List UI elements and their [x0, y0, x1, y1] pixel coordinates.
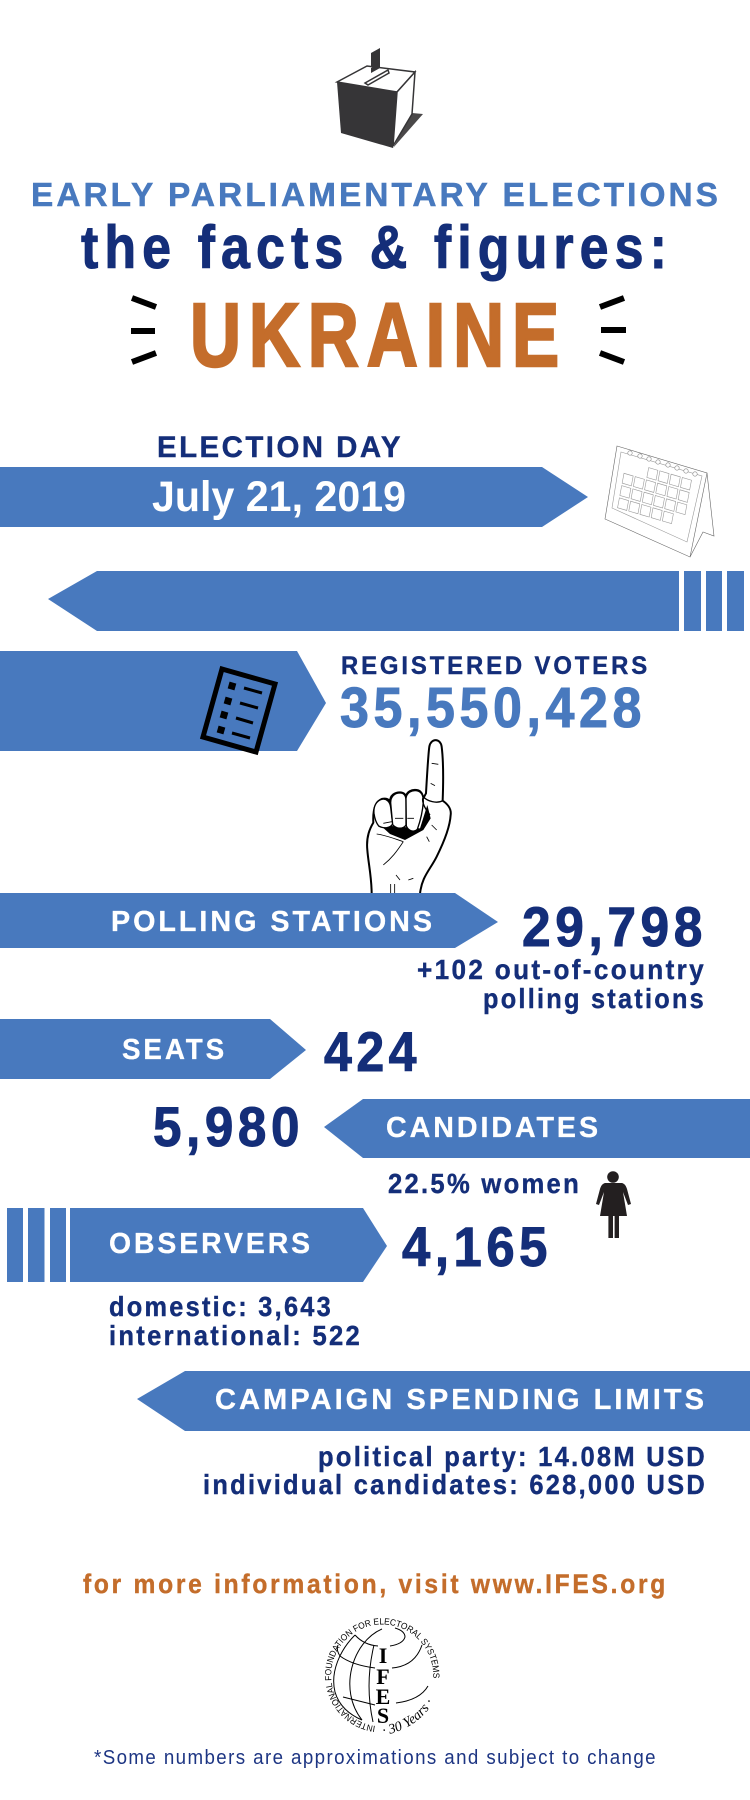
note: observer breakdown — [109, 1291, 362, 1351]
note: out-of-country stations: +102 out-of-country — [417, 954, 706, 985]
arrow: polling stations: POLLING STATIONS — [111, 906, 435, 938]
footnote: *Some numbers are approximations and subject to change — [94, 1747, 657, 1769]
logo: IFES globe: I — [379, 1643, 387, 1668]
note: observer breakdown: domestic: 3,643 — [109, 1291, 333, 1322]
title: the facts and figures: the facts & figures: — [81, 214, 673, 281]
arrow: seats — [0, 1019, 306, 1079]
logo: IFES globe: · 30 Years · — [383, 1700, 430, 1734]
icon: desk calendar — [605, 446, 714, 557]
arrow: blank left-pointing band with stripes — [48, 571, 744, 631]
icon: woman figure — [596, 1171, 631, 1238]
number: seats: 424 — [324, 1020, 421, 1083]
heading: early parliamentary elections: EARLY PARLIAMENTARY ELECTIONS — [31, 176, 721, 213]
decoration: left emphasis dashes — [131, 298, 156, 362]
note: out-of-country stations — [417, 954, 706, 1014]
note: observer breakdown: international: 522 — [109, 1320, 362, 1351]
arrow: candidates: CANDIDATES — [386, 1112, 601, 1144]
logo: IFES globe: F — [376, 1664, 390, 1689]
title: Ukraine: UKRAINE — [190, 286, 567, 386]
logo: IFES globe: S — [377, 1703, 389, 1728]
arrow: registered voters band — [0, 651, 326, 751]
arrow: observers with stripes — [7, 1208, 387, 1282]
arrow: election date: July 21, 2019 — [152, 473, 406, 521]
arrow: observers with stripes: OBSERVERS — [109, 1228, 313, 1260]
arrow: polling stations — [0, 893, 498, 948]
number: candidates: 5,980 — [153, 1095, 304, 1158]
label: registered voters: REGISTERED VOTERS — [341, 652, 650, 680]
arrow: campaign spending limits — [137, 1371, 750, 1431]
arrow: candidates — [324, 1099, 750, 1158]
label: election day: ELECTION DAY — [157, 431, 403, 464]
number: polling stations: 29,798 — [522, 895, 707, 958]
note: spending limit amounts — [203, 1441, 707, 1500]
icon: pointing hand — [367, 740, 451, 894]
icon: checklist — [203, 669, 275, 752]
arrow: campaign spending limits: CAMPAIGN SPENDING LIMITS — [215, 1384, 707, 1416]
number: observers: 4,165 — [402, 1215, 552, 1278]
note: spending limit amounts: individual candidates: 628,000 USD — [203, 1469, 707, 1500]
logo: IFES globe: E — [376, 1684, 390, 1709]
logo: IFES globe: INTERNATIONAL FOUNDATION FOR ELECTORAL SYSTEMS — [324, 1618, 440, 1732]
decoration: right emphasis dashes — [600, 298, 626, 362]
icon: ballot box — [337, 48, 423, 148]
note: spending limit amounts: political party: 14.08M USD — [318, 1441, 707, 1472]
note: out-of-country stations: polling stations — [483, 983, 706, 1014]
arrow: election date — [0, 467, 588, 527]
arrow: seats: SEATS — [122, 1034, 227, 1066]
note: women share: 22.5% women — [388, 1168, 581, 1199]
number: registered voters: 35,550,428 — [340, 676, 646, 740]
call to action: website: for more information, visit www.IFES.org — [83, 1569, 668, 1599]
